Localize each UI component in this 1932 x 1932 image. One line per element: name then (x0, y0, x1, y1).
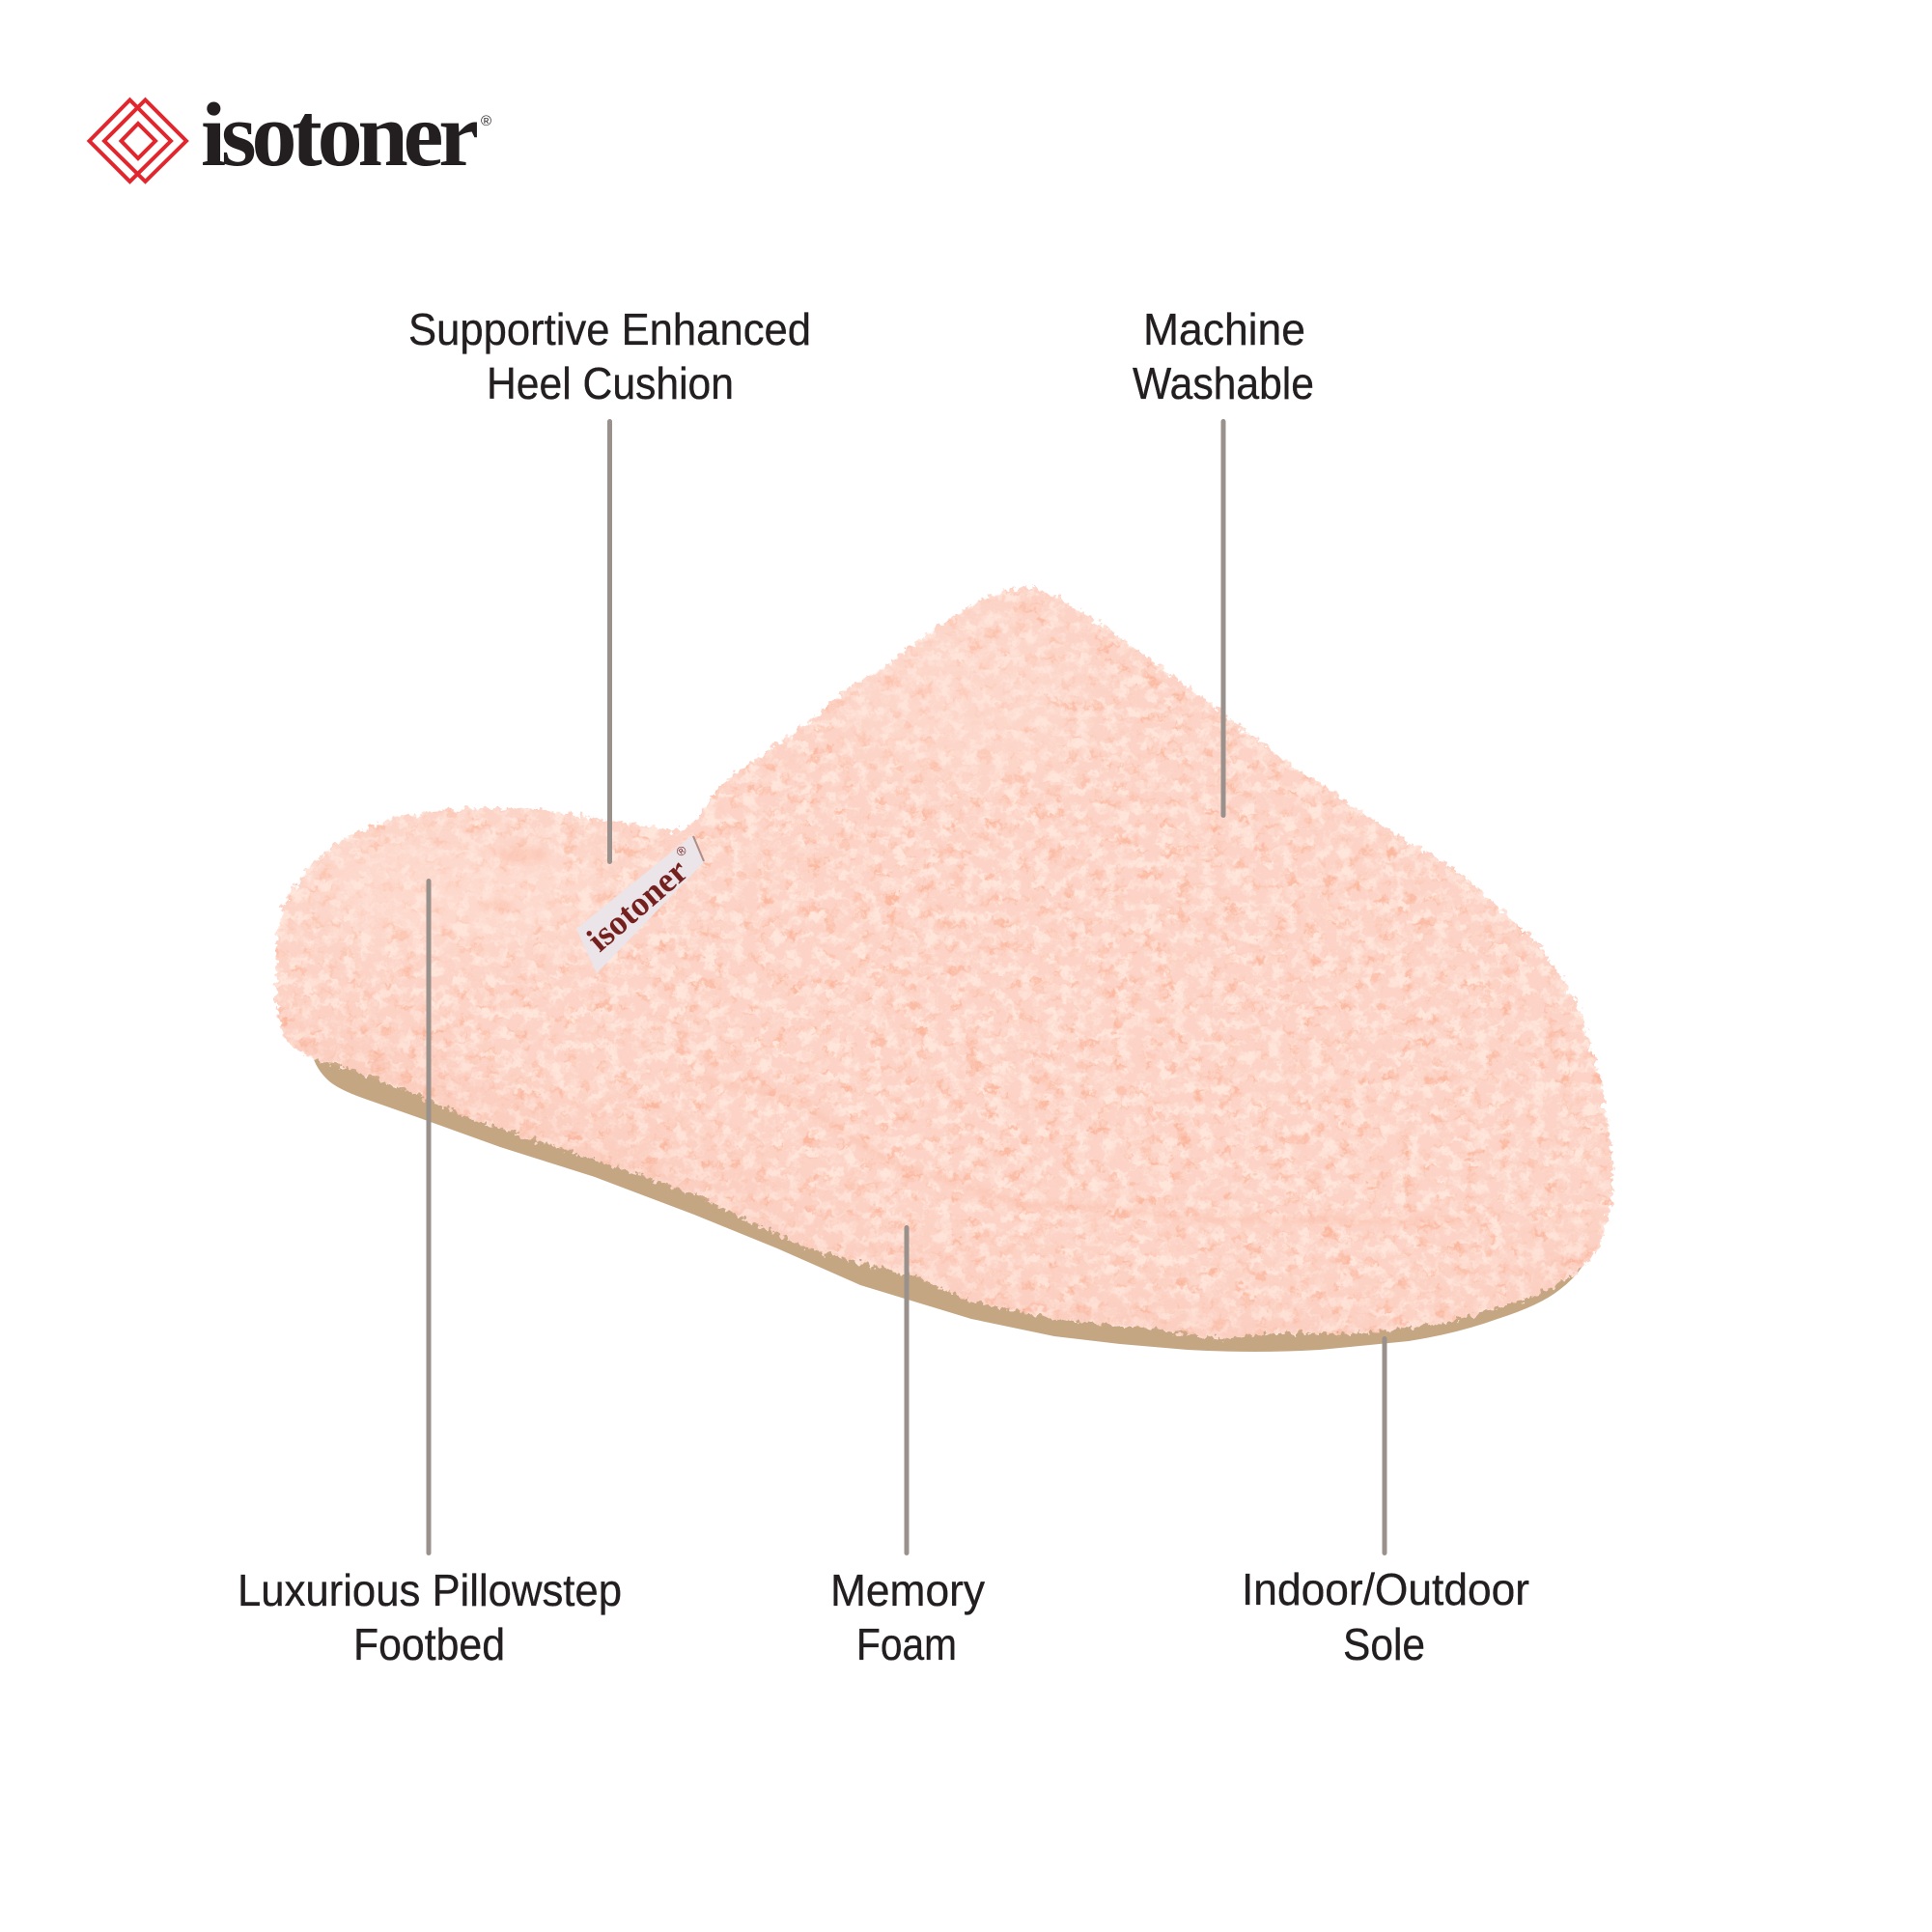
callout label: Washable (1133, 358, 1314, 408)
leader line (427, 879, 431, 1555)
callout label: Foam (856, 1619, 957, 1669)
callout label: Machine (1143, 304, 1305, 354)
leader line (904, 1225, 910, 1555)
callout label: Sole (1343, 1619, 1425, 1669)
callout label: Memory (830, 1565, 985, 1615)
slipper sole (312, 1043, 1583, 1352)
callout label: Footbed (353, 1619, 505, 1669)
callout: luxurious pillowstep footbed (238, 879, 622, 1669)
callout: memory foam (830, 1225, 985, 1669)
callout label (1133, 304, 1314, 408)
callout: supportive enhanced heel cushion (408, 304, 811, 864)
callout label: Luxurious Pillowstep (238, 1565, 622, 1615)
callout label: Supportive Enhanced (408, 304, 811, 354)
logo: isotoner (89, 85, 491, 185)
slipper fuzzy upper (276, 585, 1612, 1339)
slipper soft shading (301, 624, 1585, 1328)
callout: indoor/outdoor sole (1242, 1336, 1529, 1669)
callout label: Indoor/Outdoor (1242, 1564, 1529, 1614)
label registered mark: ® (673, 842, 690, 859)
callout label (830, 1565, 985, 1669)
illustration: pink fuzzy slipper (276, 585, 1612, 1371)
registered mark: ® (481, 113, 491, 129)
leader line (607, 419, 612, 864)
leader line (1220, 419, 1226, 818)
label text: isotoner (579, 851, 695, 959)
crease between upper and foam rim (695, 1077, 1477, 1220)
callout label (408, 304, 811, 408)
callout: machine washable (1133, 304, 1314, 818)
footbed dimples (481, 846, 546, 910)
woven brand label (576, 835, 704, 973)
icon: red diamond logo mark (89, 100, 186, 182)
callout label: Heel Cushion (487, 358, 734, 408)
callout label (238, 1565, 622, 1669)
callout label (1242, 1564, 1529, 1669)
leader line (1383, 1336, 1386, 1555)
logo wordmark: isotoner (201, 85, 479, 185)
